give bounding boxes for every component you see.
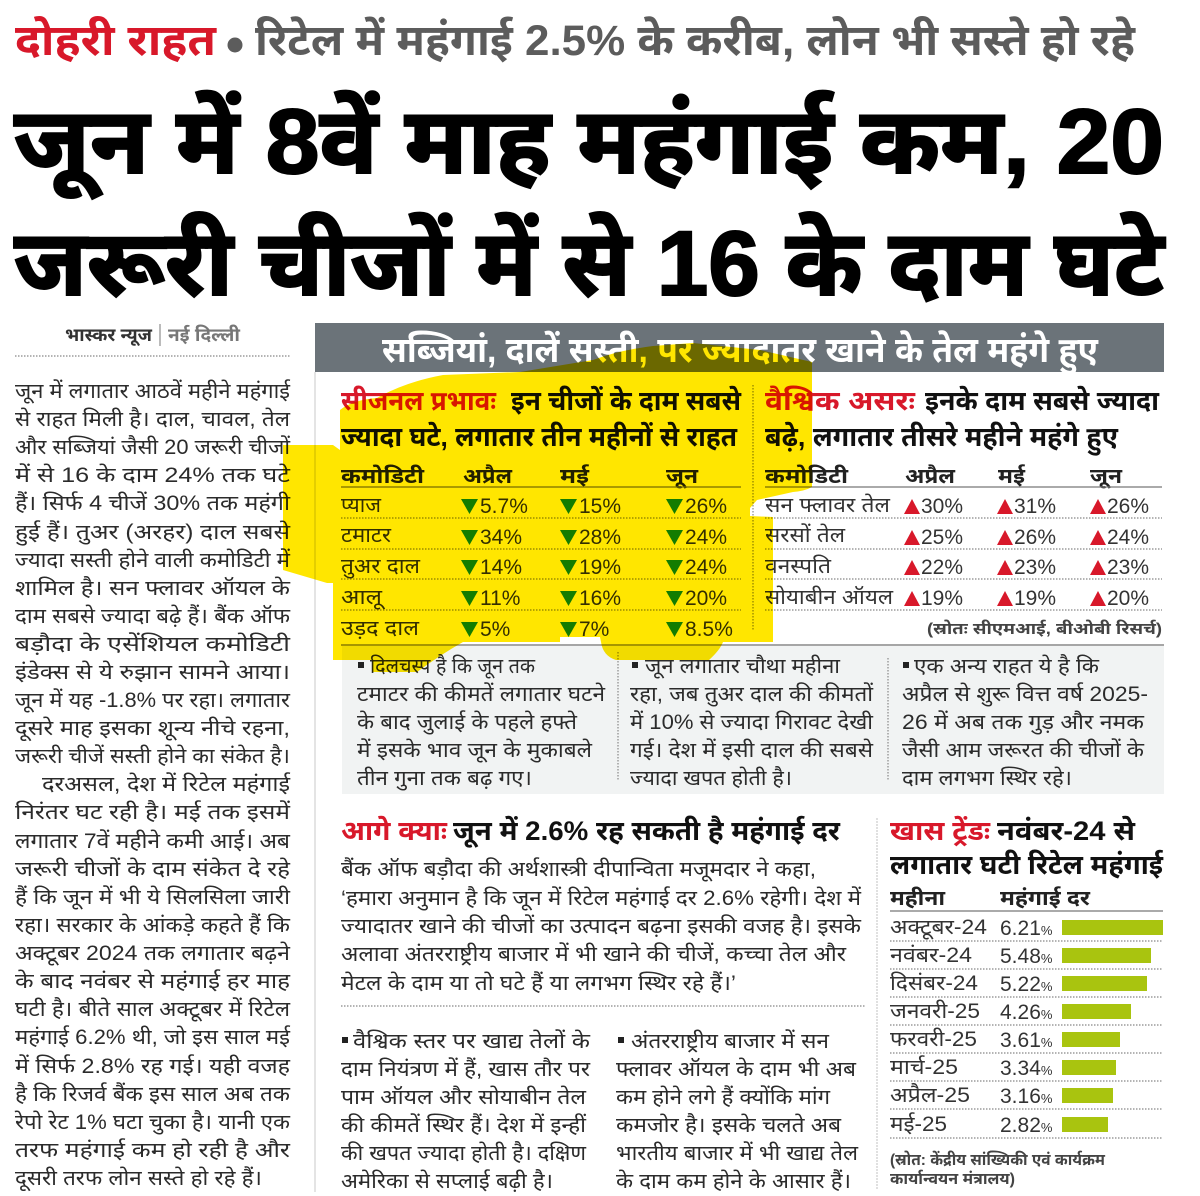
- panel: left article column: दाम सबसे ज्यादा बढ़े हैं। बैंक ऑफ: [15, 604, 291, 628]
- note: edible oil: वैश्विक स्तर पर खाद्य तेलों के: [353, 1028, 591, 1053]
- panel: left article column: और सब्जियां जैसी 20 जरूरी चीजों: [15, 434, 291, 459]
- table rows: 8.5%: [685, 618, 733, 641]
- panel: left article column: अक्टूबर 2024 तक लगातार बढ़ने: [15, 941, 290, 966]
- note: tur dal: गई। देश में इसी दाल की सबसे: [630, 738, 874, 762]
- panel: retail inflation trend chart: [890, 815, 1164, 1188]
- note: edible oil: दाम नियंत्रण में हैं, खास तौर पर: [341, 1057, 590, 1081]
- section banner: [315, 323, 1164, 375]
- table header: अप्रैल: [463, 464, 513, 488]
- table header: अप्रैल: [905, 464, 956, 488]
- table rows: 25%: [921, 526, 963, 549]
- note: sunflower oil: अंतरराष्ट्रीय बाजार में सन: [631, 1029, 829, 1053]
- panel: grey notes box: [341, 645, 1164, 794]
- note: sunflower oil: के दाम कम होने के आसार हैं।: [616, 1169, 851, 1193]
- table rows: 11%: [480, 587, 520, 610]
- table rows: सन फ्लावर तेल: [765, 493, 891, 517]
- table rows: 26%: [1107, 495, 1149, 518]
- table rows: 15%: [579, 495, 621, 518]
- heading: what next: आगे क्याः: [341, 815, 448, 846]
- heading: special trend: नवंबर-24 से: [997, 815, 1136, 846]
- source note: [890, 1150, 1106, 1188]
- table header: मई: [998, 464, 1026, 488]
- bar chart rows: 6.21%: [1000, 917, 1053, 940]
- note: sunflower oil: कम होने लगे हैं क्योंकि मांग: [616, 1085, 831, 1109]
- table rows: 19%: [579, 556, 621, 579]
- table rows: 7%: [579, 618, 609, 641]
- note: edible oil: पाम ऑयल और सोयाबीन तेल: [341, 1085, 587, 1109]
- panel: falling prices table: [341, 385, 742, 641]
- table rows: सोयाबीन ऑयल: [765, 585, 894, 609]
- table rows: 34%: [480, 526, 522, 549]
- bar chart rows: मई-25: [890, 1112, 947, 1136]
- source note: (स्रोतः सीएमआई, बीओबी रिसर्च): [927, 619, 1162, 638]
- panel: left article column: के बाद नवंबर से महंगाई हर माह: [15, 969, 291, 993]
- note: tur dal: [630, 654, 874, 790]
- panel: left article column: जरूरी चीजों के दाम संकेत दे रहे: [15, 857, 291, 881]
- bar chart rows: दिसंबर-24: [890, 971, 978, 995]
- note: tomato: के बाद जुलाई के पहले हफ्ते: [357, 710, 578, 735]
- note: tur dal: रहा, जब तुअर दाल की कीमतों: [630, 682, 874, 707]
- byline: [15, 324, 290, 356]
- panel: left article column: दूसरे माह इसका शून्य नीचे रहना,: [15, 716, 290, 742]
- table rows: 22%: [921, 556, 963, 579]
- table rows: आलू: [341, 586, 385, 610]
- table rows: सरसों तेल: [765, 523, 846, 547]
- table rows: 20%: [1107, 587, 1149, 610]
- quote paragraph: मेटल के दाम या तो घटे हैं या लगभग स्थिर रहे हैं।’: [341, 971, 736, 995]
- panel: left article column: जून में यह -1.8% पर रहा। लगातार: [15, 688, 290, 713]
- note: sunflower oil: कमजोर है। इसके चलते अब: [616, 1112, 842, 1137]
- quote paragraph: [341, 857, 862, 995]
- note: edible oil: की कीमतें स्थिर हैं। देश में इन्हीं: [341, 1113, 587, 1137]
- panel: left article column: शामिल है। सन फ्लावर ऑयल के: [15, 575, 291, 600]
- quote paragraph: ज्यादातर खाने की चीजों का उत्पादन बढ़ना इसकी वजह है। इसके: [341, 913, 862, 938]
- bar chart rows: 5.48%: [1000, 945, 1053, 968]
- table rows: 20%: [685, 587, 727, 610]
- table rows: [765, 493, 1162, 610]
- heading: special trend: लगातार घटी रिटेल महंगाई: [890, 849, 1164, 880]
- note: tomato: दिलचस्प है कि जून तक: [370, 653, 536, 679]
- panel: left article column: ज्यादा सस्ती होने वाली कमोडिटी में: [15, 548, 290, 572]
- table rows: 23%: [1014, 556, 1056, 579]
- table header: जून: [666, 465, 699, 489]
- panel: left article column: जून में लगातार आठवें महीने महंगाई: [15, 379, 291, 404]
- panel: left article column: रहा। सरकार के आंकड़े कहते हैं कि: [15, 913, 291, 937]
- main headline: जरूरी चीजों में से 16 के दाम घटे: [14, 212, 1166, 315]
- heading: global effect: बढ़े, लगातार तीसरे महीने महंगे हुए: [765, 421, 1119, 456]
- note: sunflower oil: फ्लावर ऑयल के दाम भी अब: [616, 1057, 857, 1081]
- table rows: उड़द दाल: [341, 617, 420, 640]
- table header: मई: [560, 464, 590, 488]
- note: jaggery and salt: 26 में अब तक गुड़ और नमक: [902, 710, 1145, 735]
- panel: left article column: महंगाई 6.2% थी, जो इस साल मई: [15, 1025, 291, 1049]
- bar chart rows: अप्रैल-25: [890, 1082, 970, 1107]
- panel: left article column: निरंतर घट रही है। मई तक इसमें: [15, 799, 290, 824]
- kicker line: दोहरी राहत: [15, 16, 217, 65]
- bar chart rows: 5.22%: [1000, 973, 1053, 996]
- note: jaggery and salt: [902, 653, 1148, 790]
- bar chart rows: जनवरी-25: [890, 999, 980, 1023]
- table header: [341, 464, 741, 489]
- chart header: [890, 886, 1163, 911]
- quote paragraph: अलावा अंतरराष्ट्रीय बाजार में भी खाने की चीजें, कच्चा तेल और: [341, 942, 846, 966]
- table rows: 5.7%: [480, 495, 528, 518]
- bar chart rows: 4.26%: [1000, 1001, 1053, 1024]
- table header: [765, 464, 1162, 489]
- main headline: [14, 90, 1166, 315]
- note: tur dal: ज्यादा खपत होती है।: [630, 765, 792, 790]
- panel: left article column: घटी है। बीते साल अक्टूबर में रिटेल: [15, 996, 291, 1022]
- panel: left article column: दरअसल, देश में रिटेल महंगाई: [42, 772, 291, 796]
- note: tur dal: जून लगातार चौथा महीना: [645, 654, 841, 679]
- quote paragraph: ‘हमारा अनुमान है कि जून में रिटेल महंगाई दर 2.6% रहेगी। देश में: [341, 885, 861, 911]
- main headline: जून में 8वें माह महंगाई कम, 20: [14, 90, 1164, 200]
- heading: global effect: वैश्विक असरः: [765, 385, 916, 416]
- panel: left article column: हैं। सिर्फ 4 चीजें 30% तक महंगी: [15, 491, 291, 515]
- chart header: महंगाई दर: [1000, 886, 1091, 910]
- note: tomato: तीन गुना तक बढ़ गए।: [357, 766, 532, 791]
- heading: seasonal effect: [341, 385, 742, 452]
- table rows: 26%: [685, 495, 727, 518]
- source note: कार्यान्वयन मंत्रालय): [890, 1169, 1015, 1188]
- quote paragraph: बैंक ऑफ बड़ौदा की अर्थशास्त्री दीपान्विता मजूमदार ने कहा,: [341, 857, 816, 882]
- section banner: सब्जियां, दालें सस्ती, पर ज्यादातर खाने के तेल महंगे हुए: [382, 330, 1099, 375]
- note: jaggery and salt: अप्रैल से शुरू वित्त वर्ष 2025-: [902, 681, 1148, 707]
- note: jaggery and salt: दाम लगभग स्थिर रहे।: [902, 766, 1072, 790]
- table rows: 24%: [1107, 526, 1149, 549]
- heading: what next: जून में 2.6% रह सकती है महंगाई दर: [453, 815, 841, 848]
- note: tur dal: में 10% से ज्यादा गिरावट देखी: [630, 710, 874, 734]
- bar chart rows: नवंबर-24: [890, 944, 972, 967]
- heading: seasonal effect: सीजनल प्रभावः: [341, 386, 497, 416]
- panel: rising prices table: [765, 385, 1162, 638]
- heading: global effect: [765, 385, 1160, 456]
- bar chart rows: [890, 916, 1163, 1138]
- table rows: 26%: [1014, 526, 1056, 549]
- panel: left article column: तरफ महंगाई कम हो रही है और: [15, 1137, 290, 1162]
- panel: left article column: इंडेक्स से ये रुझान सामने आया।: [15, 660, 290, 684]
- byline: नई दिल्ली: [168, 324, 241, 345]
- note: sunflower oil: भारतीय बाजार में भी खाद्य तेल: [616, 1141, 859, 1165]
- heading: global effect: इनके दाम सबसे ज्यादा: [925, 385, 1160, 416]
- yellow highlighter mark: [283, 343, 812, 672]
- table rows: 30%: [921, 495, 963, 518]
- table rows: 24%: [685, 556, 727, 579]
- table header: जून: [1090, 465, 1123, 489]
- heading: seasonal effect: इन चीजों के दाम सबसे: [511, 385, 742, 416]
- note: edible oil: [341, 1028, 591, 1193]
- note: tomato: में इसके भाव जून के मुकाबले: [357, 738, 593, 763]
- table rows: 23%: [1107, 556, 1149, 579]
- heading: seasonal effect: ज्यादा घटे, लगातार तीन महीनों से राहत: [341, 421, 738, 452]
- table rows: वनस्पति: [765, 554, 832, 578]
- note: edible oil: की खपत ज्यादा होती है। दक्षिण: [341, 1140, 587, 1165]
- note: jaggery and salt: जैसी आम जरूरत की चीजों के: [902, 737, 1145, 762]
- table rows: [341, 494, 741, 641]
- panel: left article column: में सिर्फ 2.8% रह गई। यही वजह: [15, 1054, 291, 1078]
- bar chart rows: 2.82%: [1000, 1114, 1053, 1137]
- table header: कमोडिटी: [765, 464, 849, 488]
- note: tomato: टमाटर की कीमतें लगातार घटने: [357, 682, 605, 706]
- note: tomato: [357, 653, 605, 791]
- byline: भास्कर न्यूज: [65, 325, 153, 347]
- table rows: 5%: [480, 618, 510, 641]
- heading: what next: [341, 815, 841, 848]
- panel: left article column: दूसरी तरफ लोन सस्ते हो रहे हैं।: [15, 1166, 262, 1192]
- table rows: प्याज: [341, 494, 381, 517]
- panel: left article column: से राहत मिली है। दाल, चावल, तेल: [15, 406, 291, 431]
- table rows: 28%: [579, 526, 621, 549]
- table rows: 19%: [921, 587, 963, 610]
- panel: what next: [341, 815, 865, 1193]
- bar chart rows: 3.61%: [1000, 1029, 1053, 1052]
- table rows: 24%: [685, 526, 727, 549]
- panel: left article column: [14, 379, 291, 1192]
- panel: left article column: बड़ौदा के एसेंशियल कमोडिटी: [15, 632, 291, 656]
- bar chart rows: 3.34%: [1000, 1057, 1053, 1080]
- panel: left article column: हैं कि जून में भी ये सिलसिला जारी: [15, 885, 291, 910]
- note: sunflower oil: [616, 1029, 859, 1193]
- table header: कमोडिटी: [341, 464, 425, 488]
- panel: left article column: हुई हैं। तुअर (अरहर) दाल सबसे: [15, 520, 291, 546]
- bar chart rows: 3.16%: [1000, 1085, 1053, 1108]
- source note: (स्रोत: केंद्रीय सांख्यिकी एवं कार्यक्रम: [890, 1150, 1106, 1169]
- table rows: 19%: [1014, 587, 1056, 610]
- chart header: महीना: [890, 886, 946, 910]
- panel: left article column: लगातार 7वें महीने कमी आई। अब: [15, 829, 291, 853]
- bar chart rows: मार्च-25: [890, 1055, 958, 1079]
- table rows: 16%: [579, 587, 621, 610]
- table rows: 14%: [480, 556, 522, 579]
- panel: left article column: जरूरी चीजें सस्ती होने का संकेत है।: [15, 743, 290, 768]
- table rows: 31%: [1014, 495, 1056, 518]
- panel: left article column: है कि रिजर्व बैंक इस साल अब तक: [15, 1081, 291, 1106]
- table rows: टमाटर: [341, 524, 391, 547]
- bar chart rows: अक्टूबर-24: [890, 916, 987, 940]
- note: edible oil: अमेरिका से सप्लाई बढ़ी है।: [341, 1168, 553, 1193]
- panel: left article column: में से 16 के दाम 24% तक घटे: [15, 463, 290, 487]
- heading: special trend: खास ट्रेंडः: [890, 815, 991, 847]
- kicker line: रिटेल में महंगाई 2.5% के करीब, लोन भी सस्ते हो रहे: [255, 16, 1136, 65]
- table rows: तुअर दाल: [341, 555, 421, 579]
- panel: left article column: रेपो रेट 1% घटा चुका है। यानी एक: [14, 1109, 291, 1135]
- note: jaggery and salt: एक अन्य राहत ये है कि: [914, 653, 1100, 678]
- bar chart rows: फरवरी-25: [890, 1027, 977, 1051]
- heading: special trend: [890, 815, 1164, 880]
